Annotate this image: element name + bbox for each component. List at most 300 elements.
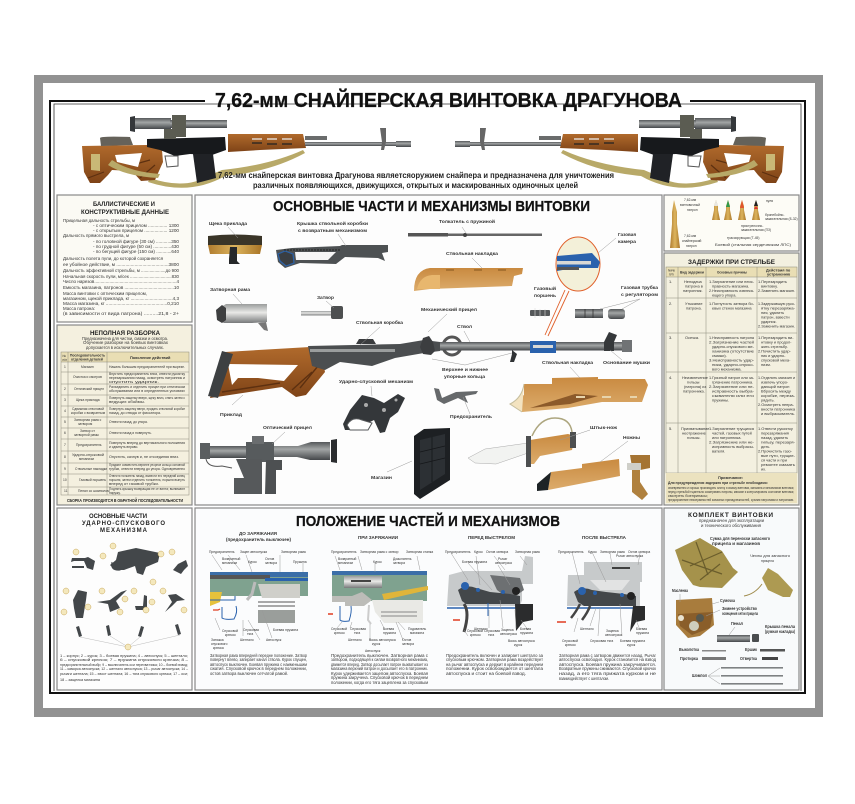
disassembly table: Щека приклада bbox=[76, 398, 100, 402]
stoppages table: 2.Неисправность извлека- bbox=[709, 288, 755, 293]
diagram: before firing: Предохранитель включен и запирает шептало за bbox=[446, 653, 544, 658]
part: assembled rifle: Верхнее и нижнее bbox=[442, 367, 488, 372]
stoppages table: 2.Заменить магазин. bbox=[758, 288, 795, 293]
diagram: while loading: Спусковой bbox=[331, 627, 347, 631]
diagram: before loading: спускового bbox=[211, 642, 228, 646]
ballistic values: - с открытым прицелом .................. 1200 bbox=[93, 228, 180, 233]
part: magazine bbox=[371, 428, 450, 499]
stoppages table: низм. bbox=[761, 362, 771, 367]
stoppages table: пружины. bbox=[712, 398, 729, 402]
diagram: before loading bbox=[209, 531, 308, 676]
cartridge labels bbox=[680, 198, 798, 248]
cartridge labels: пристрелочно- bbox=[741, 224, 763, 228]
stoppages table: Неизвлечение bbox=[682, 375, 708, 380]
disassembly table: Повернуть защелку вверх, щеку вниз, снять затем с bbox=[109, 396, 185, 400]
disassembly table: 5 bbox=[64, 420, 66, 424]
diagram: before firing: ПЕРЕД ВЫСТРЕЛОМ bbox=[468, 535, 515, 540]
heading: trigger parts: ОСНОВНЫЕ ЧАСТИ bbox=[89, 514, 147, 520]
disassembly table: Последовательность bbox=[70, 354, 105, 358]
diagram: before firing: Остов затвора bbox=[486, 550, 508, 554]
disassembly table: Разъединить и отделить прицел при оптическом bbox=[109, 385, 186, 389]
ballistic values: - по грудной фигуре (50 см) ..............430 bbox=[93, 244, 180, 249]
stoppages note: Примечание: bbox=[718, 475, 743, 480]
diagram: before firing: Предохранитель bbox=[445, 550, 471, 554]
stoppages table: ся части и при bbox=[761, 458, 787, 462]
disassembly table: Нажать большим предохранителей при вырезе. bbox=[109, 365, 185, 369]
diagram: while loading: затвора bbox=[402, 642, 414, 646]
stoppages table: (патрона) из bbox=[684, 384, 706, 389]
part: bolt carrier: Затворная рама bbox=[210, 287, 250, 292]
disassembly table: 8 bbox=[64, 455, 66, 459]
stoppages table: 2.Заменить магазин. bbox=[758, 324, 795, 328]
stoppages note: перед стрельбой тщательно осматривать патроны, магазин и контролировать состояние винтовки; bbox=[668, 490, 794, 494]
disassembly table: Поясление действий bbox=[130, 355, 171, 360]
diagram: before firing: Шептало bbox=[474, 627, 488, 631]
disassembly table: Отвести назад, до упора. bbox=[109, 420, 148, 424]
stoppages table: грязнение патронника. bbox=[712, 380, 753, 384]
diagram: before loading: Затворная рама впередней передне положение. Затвор bbox=[210, 653, 307, 658]
cartridge labels: патрон bbox=[687, 208, 698, 212]
stoppages table: 2.Прочистить газо- bbox=[758, 448, 793, 454]
ballistic values: - по бегущей фигуре (150 см) ............640 bbox=[93, 249, 180, 254]
disassembly table: 11 bbox=[64, 489, 68, 493]
diagram: while loading: Шептало bbox=[348, 638, 362, 642]
ballistic values: Число нарезов.................................................................4 bbox=[63, 279, 180, 284]
part: gas tube with regulator: с регулятором bbox=[621, 292, 659, 297]
disassembly intro: Предназначена для чистки, смазки и осмотра. bbox=[82, 336, 168, 341]
stoppages table: 2.Почистить удар- bbox=[758, 348, 792, 354]
part: assembled rifle bbox=[208, 306, 650, 417]
stoppages table: правность магазина. bbox=[712, 284, 749, 288]
ballistic values: Дальность прямого выстрела, м bbox=[63, 233, 129, 238]
disassembly table: Пенал со шомполом bbox=[78, 489, 110, 493]
diagram: after firing: Рычаг автоспуска bbox=[616, 554, 643, 558]
diagram: while loading: ПРИ ЗАРЯЖАНИИ bbox=[358, 535, 398, 540]
diagram: before loading: (предохранитель выключен) bbox=[226, 537, 291, 542]
stoppages table: перезаряжания bbox=[761, 430, 789, 436]
diagram: before loading: автоспуск выключен. Боевая пружина с наименьшим bbox=[210, 662, 307, 667]
disassembly table: Ствольные накладки bbox=[75, 467, 107, 471]
part: gas piston: поршень bbox=[534, 293, 556, 298]
disassembly table: вперед от газовой трубки. bbox=[109, 482, 159, 486]
stoppages table: Осечка. bbox=[685, 335, 699, 340]
diagram: after firing: автоспуска освободил. Курок становится на взвод bbox=[559, 657, 656, 662]
stoppages table: 5. bbox=[669, 426, 672, 431]
disassembly table: спустить ударник. bbox=[109, 380, 159, 384]
diagram: before loading: повернут влево, запирает канал ствола. Курок спущен, bbox=[210, 657, 307, 662]
title: 7,62-мм СНАЙПЕРСКАЯ ВИНТОВКА ДРАГУНОВА bbox=[215, 88, 682, 112]
diagram: after firing: Спусковая тяга bbox=[590, 639, 613, 643]
diagram: before firing: Затворная рама bbox=[515, 550, 540, 554]
diagram: before firing: автоспуска и стоит на боевой взвод. bbox=[446, 671, 526, 676]
diagram: while loading: Боевая bbox=[383, 627, 394, 631]
stoppages table: Прихватывание bbox=[681, 426, 709, 431]
panel: main parts bbox=[195, 195, 662, 505]
kit: sight case: Чехлы для запасного bbox=[750, 554, 790, 558]
diagram: after firing: взаимодействует с шепталом. bbox=[559, 676, 609, 681]
poster frame bbox=[50, 101, 805, 693]
heading: rifle kit: КОМПЛЕКТ ВИНТОВКИ bbox=[688, 512, 773, 519]
part: receiver cover: Крышка ствольной коробки bbox=[297, 220, 368, 226]
panel: rifle kit bbox=[664, 508, 799, 690]
disassembly table: 10 bbox=[63, 478, 67, 482]
diagram: while loading: Предохранитель bbox=[331, 550, 357, 554]
stoppages table: 1.Перезарядить ви- bbox=[758, 335, 794, 340]
stoppages table: ханизма (отсутствие bbox=[712, 348, 754, 354]
disassembly table: назад, до отвода от фиксатора. bbox=[109, 411, 161, 415]
stoppages table: евых стенок магазина bbox=[712, 306, 752, 310]
stoppages table: ятку перезаряжа- bbox=[761, 306, 796, 310]
part: optical sight bbox=[200, 424, 337, 494]
diagram: while loading: Спусковая bbox=[350, 627, 366, 631]
disassembly table: трубки, отвести вперед до упора. Одновременно bbox=[109, 467, 185, 471]
kit: pencil case: Крышка пенала bbox=[765, 624, 795, 629]
stoppages table: вателя. bbox=[712, 448, 725, 454]
stoppages table: 1.Отделить магазин и bbox=[758, 375, 795, 380]
kit: pouch: Масленка bbox=[672, 588, 688, 593]
disassembly table: Затворная рама с bbox=[74, 418, 102, 422]
diagram: after firing: Шептало bbox=[580, 627, 594, 631]
trigger legend bbox=[60, 653, 189, 682]
stoppages table: смазки). bbox=[712, 353, 727, 358]
diagram: while loading bbox=[328, 535, 433, 685]
trigger legend: 6 – спусковой крючок; 7 – пружина спускового крючка; 8 – bbox=[60, 657, 189, 662]
stoppages table: ремонте смазать bbox=[761, 462, 795, 467]
diagram: before loading: Спусковой bbox=[222, 629, 238, 633]
kit: carrying bag: прицела и магазинов bbox=[712, 541, 760, 546]
diagram: before loading: крючок bbox=[225, 633, 236, 637]
diagram: before firing: курок bbox=[514, 643, 523, 647]
stoppages note: своевременно и хорошо производить чистку и смазку винтовки, магазина и механизмов винтовки; bbox=[668, 486, 794, 490]
cartridge labels: бронебойно- bbox=[765, 213, 784, 217]
diagram: while loading: механизм bbox=[338, 561, 354, 565]
kit: sight case: прицела bbox=[761, 559, 774, 563]
stoppages table: п/п bbox=[669, 272, 674, 276]
ballistic values: Масса патрона: bbox=[63, 306, 95, 311]
diagram: while loading: Автоспуск bbox=[365, 649, 381, 653]
panel: cartridges bbox=[664, 195, 799, 251]
diagram: while loading: Затворная станка bbox=[406, 550, 433, 554]
stoppages table: извлечь упоро- bbox=[761, 380, 789, 384]
disassembly table: 7 bbox=[64, 443, 66, 447]
diagram: before loading: Предохранитель bbox=[209, 550, 235, 554]
part: assembled rifle: упорные кольца bbox=[444, 374, 485, 379]
diagram: while loading: затвора bbox=[393, 561, 405, 565]
stoppages table: 3.Неисправность удар- bbox=[709, 358, 755, 362]
stoppages table: Вбросить между bbox=[761, 388, 791, 394]
rifle left bbox=[82, 115, 411, 188]
part: bolt bbox=[301, 295, 343, 319]
kit: tools: Шомпол bbox=[692, 673, 707, 678]
diagram: before loading: Затворная рама bbox=[281, 550, 306, 554]
diagram: before loading: механизм bbox=[222, 561, 238, 565]
stoppages table: 2.Осмотреть непра- bbox=[758, 402, 795, 407]
diagram: before loading: Автоспуск bbox=[266, 638, 282, 642]
panel: positions of parts and mechanisms bbox=[195, 508, 662, 690]
stoppages table: 1. bbox=[669, 279, 672, 284]
diagram: after firing: пружина bbox=[636, 631, 649, 635]
diagram: before loading: тяга bbox=[247, 632, 253, 636]
diagram: before loading: Курок bbox=[248, 560, 257, 564]
rifle right bbox=[455, 115, 784, 188]
diagram: before firing: автоспуска bbox=[495, 561, 512, 565]
part: push rod: Толкатель с пружиной bbox=[439, 218, 495, 224]
diagram: while loading: Вкось автоспуска bbox=[369, 638, 396, 642]
stoppages table: 2.Загрязнение частей bbox=[709, 340, 754, 344]
diagram: before firing: спусковым крючком. Затворная рама воздействует bbox=[446, 657, 543, 662]
stoppages table: ударно-спускового ме- bbox=[712, 344, 755, 349]
kit: pencil case: (ружная накладка) bbox=[765, 629, 795, 634]
stoppages table: 1.Перезарядить bbox=[758, 279, 787, 284]
part: push rod bbox=[408, 218, 542, 237]
cartridge labels: трассирующая (Т-45) bbox=[727, 236, 759, 240]
stoppages table: ударник. bbox=[761, 319, 777, 324]
diagram: before loading: Боевая пружина bbox=[273, 628, 298, 632]
stoppages table: вности патронника bbox=[761, 406, 796, 412]
ballistic values: Масса магазина, кг ...............................................0,210 bbox=[63, 301, 180, 306]
diagram: before firing: Вкось автоспуска bbox=[508, 639, 535, 643]
diagram: after firing: Спусковой bbox=[562, 639, 578, 643]
disassembly table bbox=[61, 352, 189, 495]
heading: ballistic: КОНСТРУКТИВНЫЕ ДАННЫЕ bbox=[81, 209, 170, 216]
stoppages table: Действия по bbox=[766, 268, 791, 272]
ballistic values: - с оптическим прицелом ............... 1300 bbox=[93, 223, 180, 228]
stoppages table: их. bbox=[761, 466, 766, 472]
diagram: before firing: Спусковой bbox=[467, 629, 483, 633]
stoppages table: дить. bbox=[761, 444, 770, 449]
trigger legend: 18 – защелка магазина bbox=[60, 677, 101, 682]
diagram: before firing: крючок bbox=[470, 633, 481, 637]
diagram: while loading: Подаватель bbox=[408, 627, 426, 631]
stoppages note: смотреть боеприпасы; bbox=[668, 494, 708, 498]
part: cheek piece bbox=[208, 221, 262, 264]
stoppages table: устранению bbox=[767, 272, 791, 276]
diagram: while loading: Докылатель bbox=[393, 557, 412, 561]
diagram: after firing: Затворная рама bbox=[600, 550, 625, 554]
stoppages note: Для предупреждения задержек при стрельбе необходимо: bbox=[668, 481, 768, 485]
stoppages table: 3. bbox=[669, 335, 672, 340]
disassembly footer note: СБОРКА ПРОИЗВОДИТСЯ В ОБРАТНОЙ ПОСЛЕДОВАТЕЛЬНОСТИ bbox=[67, 498, 183, 503]
disassembly table: п/п bbox=[62, 358, 67, 362]
diagram: while loading: Предохранитель выключен. Затворная рама с bbox=[331, 653, 429, 658]
part: receiver cover bbox=[276, 220, 388, 268]
diagram: before firing: автоспуска bbox=[500, 632, 517, 636]
cartridge labels: пуля bbox=[766, 199, 773, 203]
disassembly table: Очистка и смотров bbox=[73, 375, 102, 379]
stoppages table: 2.Загрязнение или не- bbox=[709, 384, 755, 389]
part: assembled rifle: Приклад bbox=[220, 412, 242, 417]
part: trigger mechanism: Ударно-спусковой механизм bbox=[339, 378, 414, 384]
disassembly table: Отвести назад и повернуть. bbox=[109, 431, 152, 435]
heading: rifle kit bbox=[688, 512, 773, 528]
diagram: before loading: сжатия. Спусковой крючок в переднем положении, bbox=[210, 666, 307, 671]
disassembly table: затворной рамы bbox=[74, 433, 100, 437]
cartridge labels: зажигательная (ПЗ) bbox=[741, 228, 771, 232]
stoppages table: гильзы bbox=[687, 380, 700, 384]
diagram: before loading: крючка bbox=[213, 646, 224, 650]
stoppages note bbox=[666, 473, 797, 503]
heading: firing stoppages: ЗАДЕРЖКИ ПРИ СТРЕЛЬБЕ bbox=[688, 259, 776, 266]
stoppages table: Вид задержки bbox=[680, 270, 705, 274]
disassembly table: Сдвижная стволовой bbox=[72, 407, 104, 411]
diagram: while loading: затвором, подходящей к силам возвратного механизма, bbox=[331, 657, 428, 662]
stoppages note: предохранение неисправностей запасных принадлежностей, сухими патронами и патронами. bbox=[668, 498, 794, 502]
diagram: before loading: ДО ЗАРЯЖАНИЯ bbox=[239, 531, 277, 536]
diagram: after firing: Зацепка bbox=[606, 629, 619, 633]
stoppages table: ющего упора. bbox=[712, 292, 736, 298]
diagram: after firing: автоспуска. Боевая пружина закручивается. bbox=[559, 662, 656, 667]
part: magazine: Магазин bbox=[371, 475, 392, 480]
diagram: while loading: тяга bbox=[354, 631, 360, 635]
callout: gas chamber: Газовая bbox=[618, 232, 636, 237]
stoppages table: исправность выбра- bbox=[712, 388, 755, 394]
part: optical sight: Оптический прицел bbox=[263, 424, 312, 430]
disassembly table: Повернуть защелку вверх, придать стволовой коробке bbox=[109, 407, 185, 411]
heading: ballistic: БАЛЛИСТИЧЕСКИЕ И bbox=[93, 201, 155, 208]
stoppages table: патрона. bbox=[686, 306, 702, 310]
ballistic values: Дальность эффективной стрельбы, м ....................до 900 bbox=[63, 268, 180, 273]
diagram: while loading: магазина bbox=[410, 631, 424, 635]
diagram: while loading: Остов bbox=[402, 638, 412, 642]
disassembly table: Повернуть вперед до вертикального положения bbox=[109, 441, 185, 445]
diagram: before loading: Возвратный bbox=[222, 557, 241, 561]
ballistic values bbox=[63, 218, 180, 316]
diagram: before loading: Шептало bbox=[240, 638, 254, 642]
diagram: while loading: пружина закручена. Спусковой крючок в переднем bbox=[331, 675, 428, 680]
disassembly table: поршня, затем отделить толкатель; поршня вынуть bbox=[109, 478, 185, 482]
diagram: before firing: Курок bbox=[474, 550, 483, 554]
disassembly table: 1 bbox=[64, 365, 66, 369]
trigger legend: рычаги шептала; 15 – хвост шептала; 16 – тяга спускового крючка; 17 – оси; bbox=[60, 671, 188, 676]
cartridge labels: снайперский bbox=[682, 239, 702, 243]
stoppages table: Неподача bbox=[684, 279, 703, 284]
diagram: while loading: Курок удерживается зацепом автоспуска. Боевая bbox=[331, 671, 429, 676]
stoppages table: неотражение bbox=[682, 430, 706, 436]
stoppages table: нтовку и продол- bbox=[761, 340, 792, 344]
cartridge labels: зажигательная (Б-32) bbox=[765, 217, 798, 221]
stoppages table: ния, удалить bbox=[761, 310, 784, 315]
disassembly table: Затвор от bbox=[80, 429, 95, 433]
kit: tools bbox=[679, 647, 785, 685]
panel: trigger mechanism parts bbox=[57, 508, 192, 690]
stoppages table: винтовку. bbox=[761, 284, 778, 288]
stoppages table: 1.Загрязнение или неис- bbox=[709, 279, 755, 284]
diagram: before firing: пружина bbox=[520, 631, 533, 635]
intro text: различных появляющихся, движущихся, открытых и маскированных одиночных целей bbox=[253, 181, 578, 190]
disassembly intro: Обучение разборке на боевых винтовках bbox=[83, 340, 169, 345]
diagram: before firing: на рычаг автоспуска и держит в крайнем переднем bbox=[446, 662, 543, 667]
callout: gas chamber bbox=[545, 232, 636, 336]
disassembly table: Магазин bbox=[81, 365, 94, 369]
part: bolt: Затвор bbox=[317, 295, 334, 300]
disassembly table: Поднять крышку возвращая ее от винта; вынимают bbox=[109, 487, 185, 491]
disassembly table: Газовый поршень bbox=[79, 478, 106, 482]
stoppages table: Основные причины bbox=[717, 270, 748, 274]
stoppages table: гильзу, перезаря- bbox=[761, 440, 796, 444]
disassembly table: Впустить предохранитель вниз, отвести рукоятку bbox=[109, 372, 185, 376]
kit: carrying bag: Сумка для переноски запасного bbox=[710, 536, 770, 541]
part: lower handguard bbox=[510, 360, 648, 412]
disassembly table: затвором bbox=[78, 422, 93, 426]
disassembly table: перезаряжания назад, осмотреть патронник и bbox=[109, 376, 185, 380]
stoppages table: ник и ударно- bbox=[761, 353, 786, 358]
diagram: while loading: пружина bbox=[383, 631, 396, 635]
ballistic values: Дальность полета пули, до которой сохраняется bbox=[63, 256, 164, 261]
kit: pouch: Зимнее устройство bbox=[722, 605, 757, 611]
stoppages table: коробке, переза- bbox=[761, 393, 796, 398]
diagram: after firing: Затворная рама с затвором движется назад. Рычаг bbox=[559, 653, 656, 658]
diagram: after firing bbox=[557, 535, 657, 681]
stoppages table: №№ bbox=[668, 268, 676, 272]
stoppages table: спусковой меха- bbox=[761, 358, 791, 362]
stoppages table: патронник. bbox=[683, 288, 703, 293]
disassembly table: 3 bbox=[64, 398, 66, 402]
disassembly table: Предохранитель bbox=[76, 443, 102, 447]
heading: trigger parts: УДАРНО-СПУСКОВОГО bbox=[82, 521, 165, 527]
stoppages table bbox=[666, 267, 797, 473]
kit: sight case bbox=[744, 554, 793, 597]
kit: tools: Ершик bbox=[745, 647, 758, 652]
part: gas tube with regulator: Газовая трубка bbox=[621, 284, 658, 290]
diagram: before loading: Зацеп автоспускa bbox=[240, 550, 267, 554]
stoppages table: Утыкание bbox=[685, 301, 702, 306]
heading: main parts: ОСНОВНЫЕ ЧАСТИ И МЕХАНИЗМЫ ВИНТОВКИ bbox=[273, 198, 590, 215]
diagram: while loading: крючок bbox=[334, 631, 345, 635]
disassembly intro bbox=[82, 336, 169, 350]
part: bayonet bbox=[468, 418, 618, 467]
trigger legend: 1 – корпус; 2 – курок; 3 – боевая пружина; 4 – автоспуск; 5 – шептало; bbox=[60, 653, 188, 658]
diagram: before firing: тяга bbox=[488, 633, 494, 637]
stoppages table: назад, удалить bbox=[761, 435, 788, 440]
heading: rifle kit: и технического обслуживания bbox=[701, 523, 762, 528]
diagram: before loading: затвора bbox=[265, 561, 277, 565]
ballistic values: магазином, щекой приклада, кг .................................4,3 bbox=[63, 296, 180, 301]
part number markers bbox=[61, 543, 187, 650]
diagram: while loading: Затворная рама с затвор bbox=[360, 550, 399, 554]
cartridge labels: 7,62-мм bbox=[684, 234, 697, 238]
stoppages table: частей, газовых путей bbox=[712, 430, 752, 436]
part: lower handguard: Ствольная накладка bbox=[542, 360, 593, 365]
diagram: after firing: ПОСЛЕ ВЫСТРЕЛА bbox=[582, 535, 627, 540]
stoppages table: 1.Задержавшую руко- bbox=[758, 301, 796, 306]
cartridge labels: винтовочный bbox=[680, 203, 700, 207]
diagram: after firing: Боевая пружина bbox=[620, 639, 645, 643]
stoppages table: вые пути, трущие- bbox=[761, 453, 796, 458]
diagram: while loading: движется вперед. Затвор досылает патрон выхватывает из bbox=[331, 662, 428, 667]
diagram: while loading: положении, когда его тяга зацеплена за спусковым bbox=[331, 680, 428, 685]
diagram: after firing: назад, а его тяга прижата курком и не bbox=[559, 671, 657, 676]
heading: ballistic bbox=[81, 201, 170, 216]
ballistic values: Начальная скорость пули, м/сек ..................................830 bbox=[63, 274, 180, 279]
ballistic values: - по головной фигуре (30 см) ............350 bbox=[93, 239, 180, 244]
heading: rifle kit: предназначен для эксплуатации bbox=[699, 518, 765, 523]
diagram: before loading: Затяжка bbox=[211, 638, 224, 642]
stoppages table: 4. bbox=[669, 375, 672, 380]
part: assembled rifle: Основание мушки bbox=[603, 360, 650, 365]
heading: trigger parts bbox=[82, 514, 165, 534]
white poster sheet bbox=[43, 83, 815, 708]
stoppages table: и выбрасыватель. bbox=[761, 411, 795, 416]
stoppages table: 2.Загрязнение или не- bbox=[709, 440, 755, 444]
kit: pouch: Сумочка bbox=[720, 598, 735, 603]
ballistic values: ее убойное действие, м ........................................3800 bbox=[63, 262, 180, 267]
stoppages table: ника, ударно-спуско- bbox=[712, 362, 755, 367]
diagram: after firing: автоспуска bbox=[605, 633, 622, 637]
diagram: after firing: Предохранитель bbox=[558, 550, 584, 554]
main cartridge bbox=[670, 200, 680, 248]
ballistic values: Прицельная дальность стрельбы, м bbox=[63, 218, 135, 223]
stoppages table: или патронника. bbox=[712, 435, 742, 440]
